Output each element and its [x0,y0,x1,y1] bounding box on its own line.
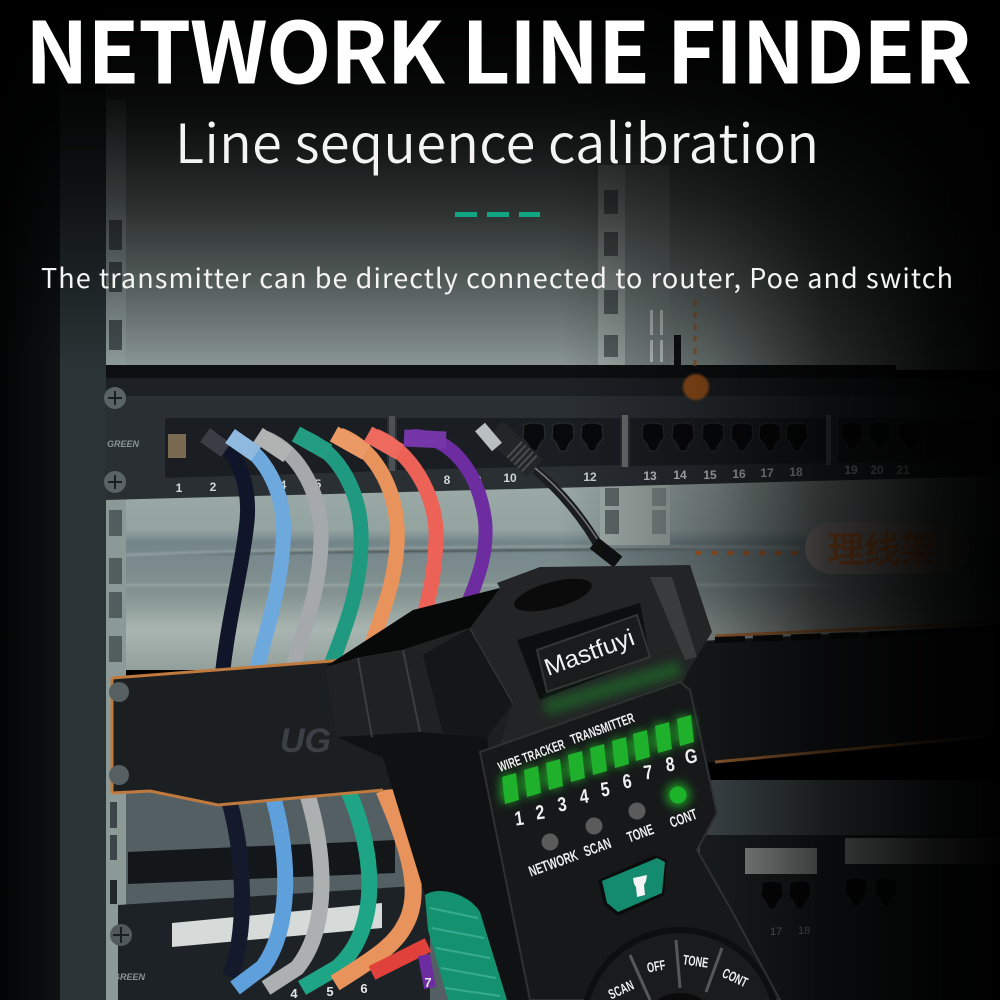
patch cables [205,427,618,988]
grip body [337,732,530,1000]
rack rail with holes [106,100,126,1000]
port numbers: 15 [703,468,717,482]
orange marker dot [683,374,709,400]
port numbers: 14 [673,468,687,482]
LED numbers: 7 [642,761,654,784]
middle light wall [106,470,1000,670]
LED numbers: 6 [621,770,633,793]
port numbers: 1 [176,481,183,495]
port numbers: 5 [315,477,322,491]
rear lower equipment: 18 [798,925,810,937]
mode indicator labels: CONT [667,806,700,831]
dial buttons: OFF [646,957,667,976]
subtitle: Line sequence calibration [175,100,819,179]
cable: purple [404,436,486,610]
port numbers: 10 [503,471,517,485]
brand plate recess [517,603,650,700]
LED bar row [501,715,694,804]
LED numbers: 8 [664,753,676,776]
dial buttons: TONE [682,951,709,971]
port numbers lower: 6 [360,981,368,996]
green dashes divider [455,212,540,217]
display panel face [480,682,780,1000]
cable: blue [230,436,284,700]
nose facet [423,628,513,737]
LED numbers: 4 [578,785,590,808]
port numbers lower [290,975,432,1000]
nose front [325,628,513,737]
LED glow [501,717,692,802]
patch panel upper [104,378,1000,500]
mode indicator labels: SCAN [581,835,613,860]
port numbers: 19 [844,463,858,477]
rear lower equipment: GREEN [113,972,146,982]
port numbers lower: 7 [424,975,432,990]
port numbers: 9 [475,473,482,487]
mode labels [496,709,637,775]
patch panel middle with orange outline [109,622,1000,805]
top head [470,565,712,745]
brand plate [537,615,650,692]
left rail column [0,0,106,1000]
main body [480,682,780,1000]
description text: The transmitter can be directly connected to router, Poe and switch [41,257,953,296]
patch panel middle with orange outline: UG [280,722,331,760]
port numbers: 16 [732,467,746,481]
lower wall [106,780,1000,1000]
mode indicator labels: TONE [625,821,656,846]
green rubber grip [425,891,507,1000]
mode indicator labels: NETWORK [527,847,581,880]
mode indicator labels [527,806,700,880]
port numbers: 3 [246,479,253,493]
green glow [545,668,680,708]
port numbers [176,463,910,495]
dial buttons [584,927,776,1000]
cable: orange [334,434,397,650]
cables: lower [226,790,430,988]
tester cable with RJ45 plug [480,427,618,562]
patch panel upper: GREEN [107,439,140,449]
brand plate: Mastfuyi [541,624,638,682]
cable: grey [258,435,321,695]
dial knob [511,572,595,618]
top shelf [106,365,896,379]
port numbers: 20 [870,463,884,477]
wall shelf reflection lines [126,547,830,585]
port numbers: 12 [583,470,597,484]
port numbers: 13 [643,469,657,483]
port numbers: 17 [760,466,774,480]
LED numbers: G [683,745,699,768]
mode labels: TRANSMITTER [568,709,637,747]
port numbers: 8 [444,473,451,487]
far upright [598,165,670,545]
port numbers: 21 [896,463,910,477]
LED numbers [513,745,699,830]
mode labels: WIRE TRACKER [496,736,567,775]
port numbers: 2 [210,480,217,494]
LED numbers: 5 [599,778,611,801]
nose top surface [325,588,512,667]
LED numbers: 3 [556,793,568,816]
mode indicator dots [542,783,690,850]
tester device [325,565,780,1000]
cable: red [368,434,436,630]
label tag with Chinese text [695,522,970,574]
LED numbers: 2 [534,801,546,824]
cable: navy [205,435,248,700]
rear lower equipment [110,835,1000,1000]
orange connector dashes [694,300,696,370]
rear lower equipment: 17 [770,926,782,938]
cable: green [296,434,361,680]
port numbers: 18 [789,465,803,479]
port numbers lower: 5 [326,984,334,999]
upper rack wall [106,0,1000,370]
port numbers: 4 [280,478,287,492]
label tag with Chinese text: 理线架 [828,529,936,570]
LED numbers: 1 [513,807,525,830]
green flashlight button [598,855,667,916]
dial buttons: CONT [720,965,751,991]
